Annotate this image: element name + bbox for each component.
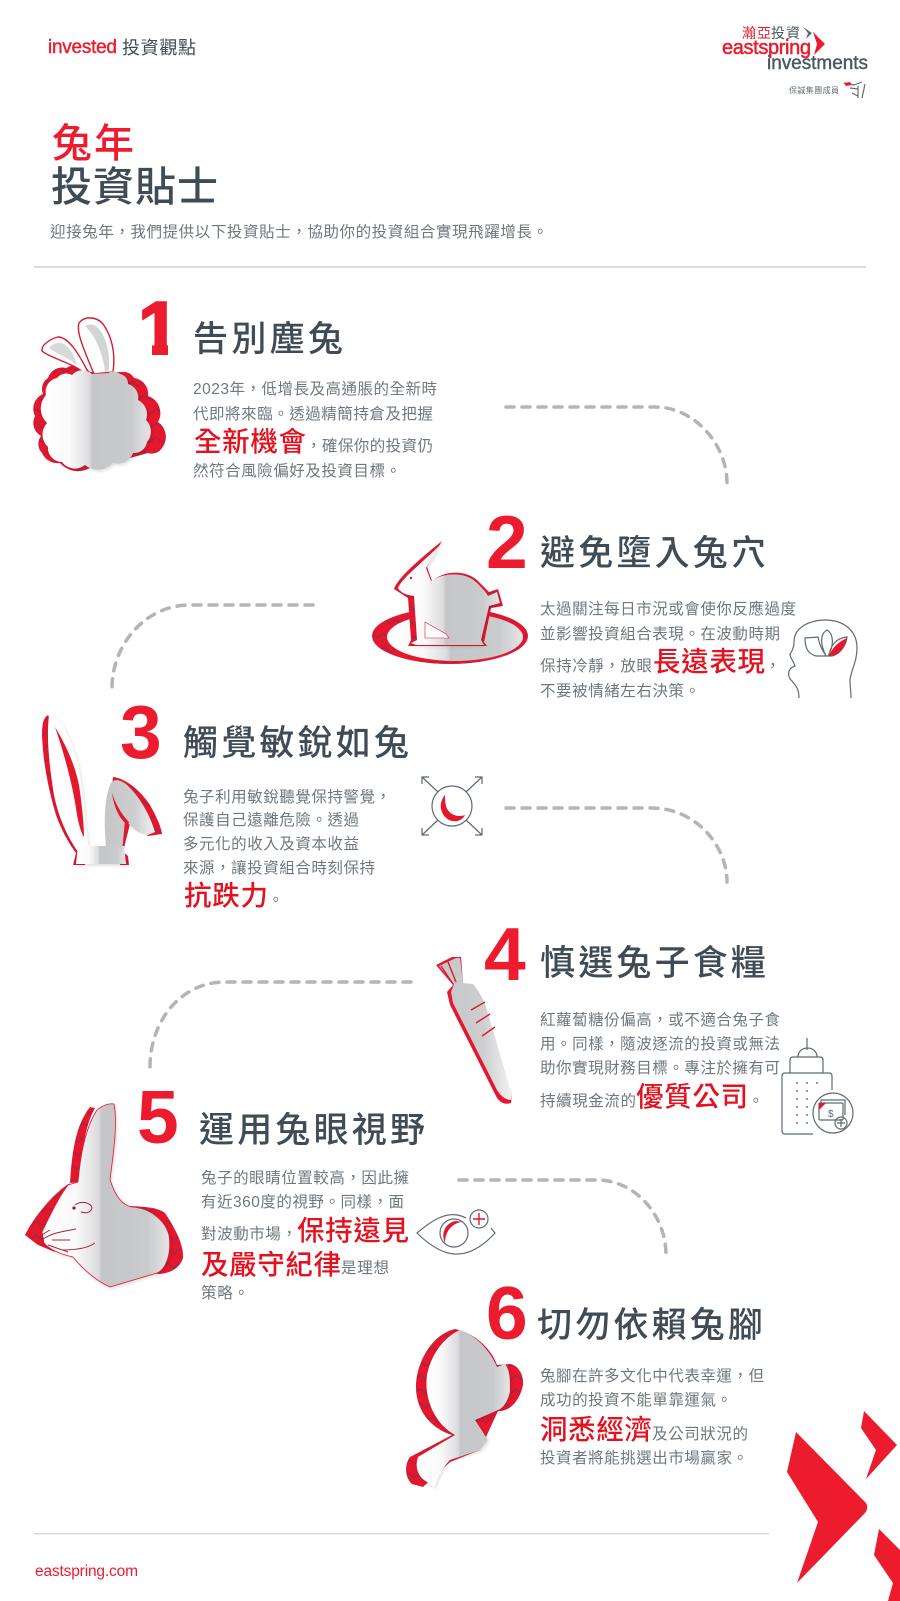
- body text: [201, 1169, 409, 1302]
- body text: 。: [268, 892, 284, 909]
- heading: 運用兔眼視野: [199, 1111, 425, 1150]
- body text: [183, 787, 391, 911]
- body text: 洞悉經濟: [540, 1414, 652, 1445]
- title: 投資貼士: [51, 164, 218, 210]
- icon: eye with plus: [417, 1210, 495, 1254]
- panel: tip 3: [42, 690, 482, 911]
- title: [51, 122, 218, 210]
- body text: 對波動市場，: [201, 1225, 297, 1243]
- logo: eastspring investments: eastspring: [722, 37, 811, 59]
- body text: 用。同樣，隨波逐流的投資或無法: [540, 1035, 780, 1053]
- body text: 全新機會: [194, 426, 306, 457]
- illustration: rabbit foot: [406, 1329, 523, 1487]
- body text: 多元化的收入及資本收益: [183, 835, 359, 853]
- body text: 助你實現財務目標。專注於擁有可: [540, 1058, 780, 1077]
- heading: 告別塵兔: [193, 320, 343, 359]
- logo: invested 投資觀點: 投資觀點: [122, 38, 196, 58]
- panel: tip 4: [436, 912, 853, 1134]
- heading: 避免墮入兔穴: [540, 534, 766, 573]
- body text: 持續現金流的: [540, 1091, 636, 1110]
- connector 2 to 3: [112, 605, 313, 688]
- number 3: 3: [120, 690, 162, 774]
- illustration: rabbit head: [25, 1104, 183, 1287]
- logo: eastspring investments: [722, 25, 868, 98]
- body text: 。: [748, 1093, 764, 1110]
- body text: 不要被情緒左右決策。: [540, 681, 700, 700]
- body text: [540, 1367, 764, 1467]
- body text: ，確保你的投資仍: [306, 437, 433, 455]
- footer url: eastspring.com: [35, 1563, 138, 1580]
- number 2: 2: [486, 500, 528, 584]
- body text: 有近360度的視野。同樣，面: [201, 1193, 404, 1211]
- body text: 保持遠見: [297, 1215, 409, 1246]
- body text: [193, 380, 437, 480]
- logo: eastspring investments: 投資: [771, 25, 800, 41]
- heading: 慎選兔子食糧: [540, 944, 766, 983]
- logo: invested 投資觀點: [48, 37, 196, 58]
- subtitle: 迎接兔年，我們提供以下投資貼士，協助你的投資組合實現飛躍增長。: [50, 222, 548, 241]
- icon: head with leaves: [789, 620, 857, 698]
- number 6: 6: [486, 1271, 528, 1355]
- body text: ，: [765, 658, 781, 675]
- body text: 然符合風險偏好及投資目標。: [193, 462, 401, 480]
- connector 1 to 2: [506, 407, 727, 483]
- logo: eastspring investments: 保誠集團成員: [789, 85, 839, 95]
- connector 4 to 5: [150, 982, 411, 1067]
- illustration: rabbit ears: [42, 715, 162, 865]
- number 1: 1: [138, 286, 180, 370]
- body text: 兔子的眼睛位置較高，因此擁: [201, 1169, 409, 1187]
- connector 5 to 6: [459, 1180, 666, 1255]
- heading: 觸覺敏銳如兔: [183, 724, 409, 763]
- body text: 太過關注每日市況或會使你反應過度: [540, 599, 796, 618]
- heading: 切勿依賴兔腳: [537, 1306, 763, 1345]
- body text: [540, 599, 796, 700]
- connector 3 to 4: [506, 808, 727, 882]
- body text: [540, 1011, 780, 1112]
- body text: 兔腳在許多文化中代表幸運，但: [540, 1367, 764, 1385]
- body text: 策略。: [201, 1283, 249, 1302]
- body text: 長遠表現: [653, 646, 765, 677]
- body text: 兔子利用敏銳聽覺保持警覺，: [183, 787, 391, 806]
- illustration: rabbit on burrow: [372, 541, 528, 664]
- illustration: carrot: [436, 957, 512, 1104]
- body text: 保持冷靜，放眼: [540, 656, 652, 675]
- body text: 抗跌力: [184, 880, 268, 911]
- icon: alert circle with arrows: [422, 777, 482, 835]
- body text: 成功的投資不能單靠運氣。: [540, 1391, 732, 1409]
- logo: eastspring investments: 瀚亞: [742, 25, 771, 41]
- number 5: 5: [137, 1075, 179, 1159]
- body text: 代即將來臨。透過精簡持倉及把握: [193, 404, 433, 423]
- body text: 及公司狀況的: [652, 1425, 748, 1443]
- panel: tip 5: [25, 1075, 495, 1302]
- panel: tip 1: [33, 286, 437, 480]
- number 4: 4: [484, 912, 526, 996]
- body text: 來源，讓投資組合時刻保持: [183, 858, 375, 877]
- body text: 優質公司: [636, 1081, 748, 1112]
- body text: 是理想: [341, 1259, 389, 1277]
- panel: tip 2: [372, 500, 857, 700]
- decorative chevrons: [787, 1411, 900, 1601]
- body text: 並影響投資組合表現。在波動時期: [540, 625, 780, 643]
- body text: 投資者將能挑選出市場贏家。: [540, 1449, 748, 1467]
- body text: 2023年，低增長及高通脹的全新時: [193, 380, 437, 398]
- illustration: rabbit from behind: [33, 318, 166, 471]
- icon: building with money: [782, 1038, 853, 1134]
- body text: 紅蘿蔔糖份偏高，或不適合兔子食: [540, 1011, 780, 1029]
- body text: 及嚴守紀律: [201, 1249, 341, 1280]
- body text: 保護自己遠離危險。透過: [183, 811, 359, 829]
- logo: invested 投資觀點: invested: [48, 37, 117, 58]
- icon: building with money: $: [828, 1109, 834, 1120]
- title: 兔年: [52, 122, 134, 166]
- panel: tip 6: [406, 1271, 764, 1487]
- logo: eastspring investments: investments: [767, 53, 868, 74]
